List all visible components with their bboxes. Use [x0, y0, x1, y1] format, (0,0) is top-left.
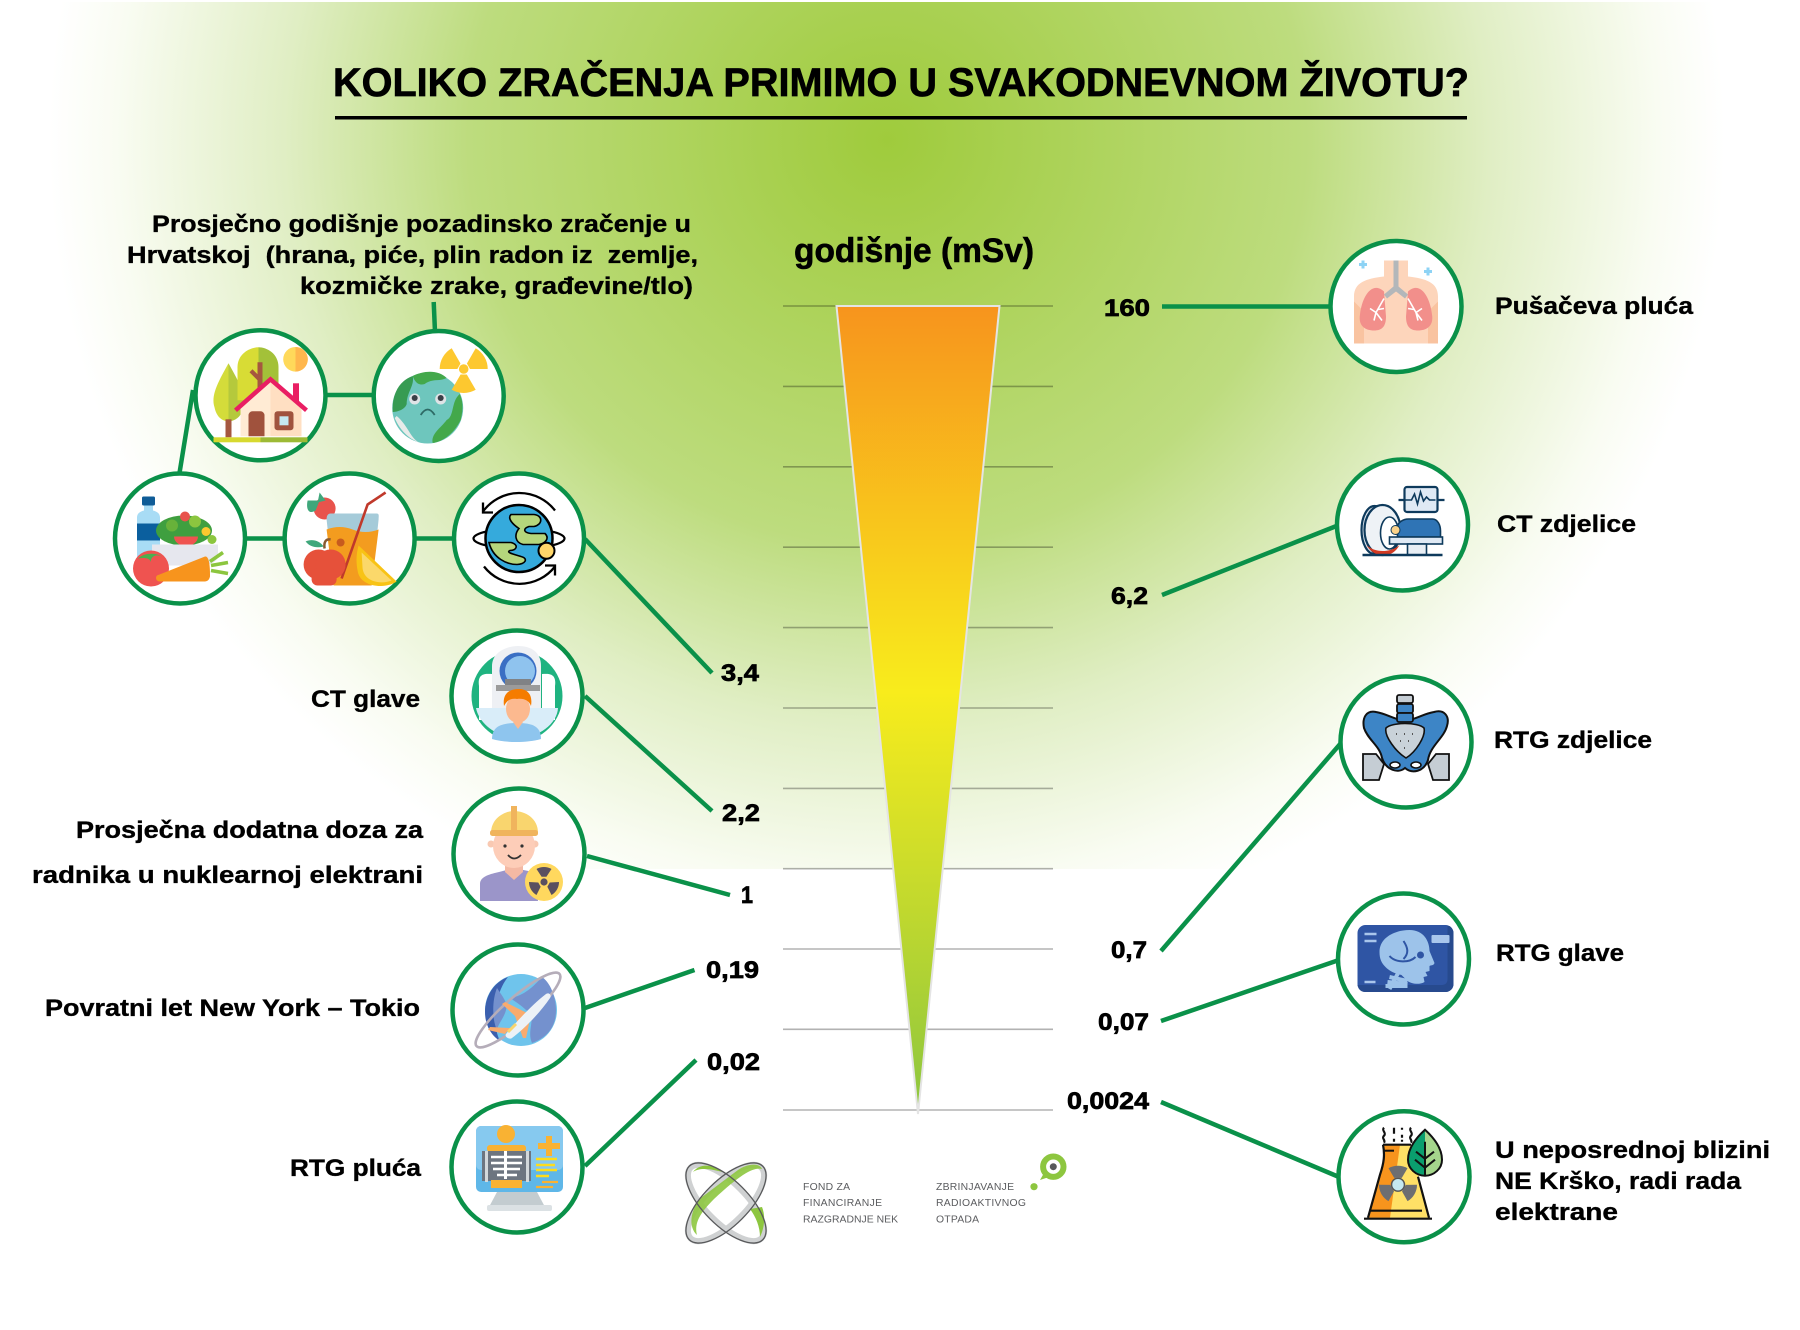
label: RTG pluća [290, 1155, 422, 1182]
icon: pelvis [1340, 676, 1472, 808]
label: RTG zdjelice [1494, 727, 1652, 754]
icon: house and trees [196, 330, 326, 460]
logo: Zbrinjavanje radioaktivnog otpada: OTPADA [936, 1214, 979, 1226]
panel: Pušačeva pluća [1104, 241, 1694, 372]
icon: juice and fruit [285, 474, 415, 604]
scale heading: godišnje (mSv) [794, 232, 1034, 270]
logo: Zbrinjavanje radioaktivnog otpada: ZBRINJAVANJE [936, 1182, 1014, 1193]
label: Prosječna dodatna doza za [76, 817, 424, 844]
value: 6,2 [1111, 583, 1148, 610]
logo: Zbrinjavanje radioaktivnog otpada: RADIOAKTIVNOG [936, 1198, 1026, 1209]
panel: background radiation description: Prosječno godišnje pozadinsko zračenje u [152, 211, 691, 238]
title: KOLIKO ZRAČENJA PRIMIMO U SVAKODNEVNOM ŽIVOTU? [333, 59, 1469, 105]
panel: RTG glave [1098, 894, 1624, 1036]
background radial gradient [0, 2, 1800, 869]
label: CT zdjelice [1497, 511, 1636, 538]
panel: CT glave [311, 630, 760, 827]
value: 0,07 [1098, 1009, 1149, 1036]
icon: plane around globe [452, 944, 584, 1076]
icon: nuclear plant with leaf [1338, 1111, 1470, 1242]
label: elektrane [1495, 1199, 1618, 1226]
icon: food and drink [115, 474, 245, 604]
panel: background radiation icon chain [115, 302, 712, 673]
value: 0,02 [707, 1049, 760, 1076]
panel: U neposrednoj blizini NE Krško [1067, 1088, 1770, 1242]
icon: chest x-ray monitor [452, 1102, 582, 1232]
logo: Zbrinjavanje radioaktivnog otpada [936, 1156, 1064, 1226]
logo: Fond za financiranje razgradnje NEK: FINANCIRANJE [803, 1198, 882, 1209]
panel: background radiation description: kozmičke zrake, građevine/tlo) [300, 273, 693, 300]
label: Pušačeva pluća [1495, 293, 1694, 320]
value: 160 [1104, 295, 1150, 322]
panel: CT zdjelice [1111, 460, 1636, 610]
icon: skull x-ray [1338, 894, 1469, 1024]
icon: head CT scan [452, 630, 582, 762]
label: CT glave [311, 686, 420, 713]
label [1495, 1137, 1770, 1226]
label: U neposrednoj blizini [1495, 1137, 1770, 1164]
panel: 3,4 value: 3,4 [721, 660, 760, 687]
panel: background radiation description [127, 211, 698, 300]
label: Povratni let New York – Tokio [45, 995, 420, 1022]
icon: CT scanner [1337, 460, 1468, 590]
panel: Povratni let New York – Tokio [45, 944, 759, 1076]
icon: sad earth with radiation symbol [374, 331, 504, 461]
label: RTG glave [1496, 940, 1624, 967]
label: radnika u nuklearnoj elektrani [32, 862, 423, 889]
label [32, 817, 424, 889]
value: 0,19 [706, 957, 759, 984]
value: 0,7 [1111, 937, 1147, 964]
value: 2,2 [722, 800, 760, 827]
value: 0,0024 [1067, 1088, 1150, 1115]
chart: annual dose wedge with scale lines [783, 306, 1053, 1114]
icon: globe with arrows [454, 474, 584, 604]
logo: Fond za financiranje razgradnje NEK: FOND ZA [803, 1182, 850, 1193]
label: NE Krško, radi rada [1495, 1168, 1742, 1195]
icon: lungs [1330, 241, 1462, 372]
panel: background radiation description: Hrvatskoj (hrana, piće, plin radon iz zemlje, [127, 242, 698, 269]
icon: nuclear plant worker [454, 788, 584, 920]
panel: radnik u nuklearnoj elektrani [32, 788, 753, 920]
panel: RTG zdjelice [1111, 676, 1652, 964]
logo: Fond za financiranje razgradnje NEK [673, 1150, 898, 1256]
panel: RTG pluća [290, 1049, 760, 1232]
logo: Fond za financiranje razgradnje NEK: RAZGRADNJE NEK [803, 1214, 898, 1226]
value: 1 [741, 882, 753, 909]
